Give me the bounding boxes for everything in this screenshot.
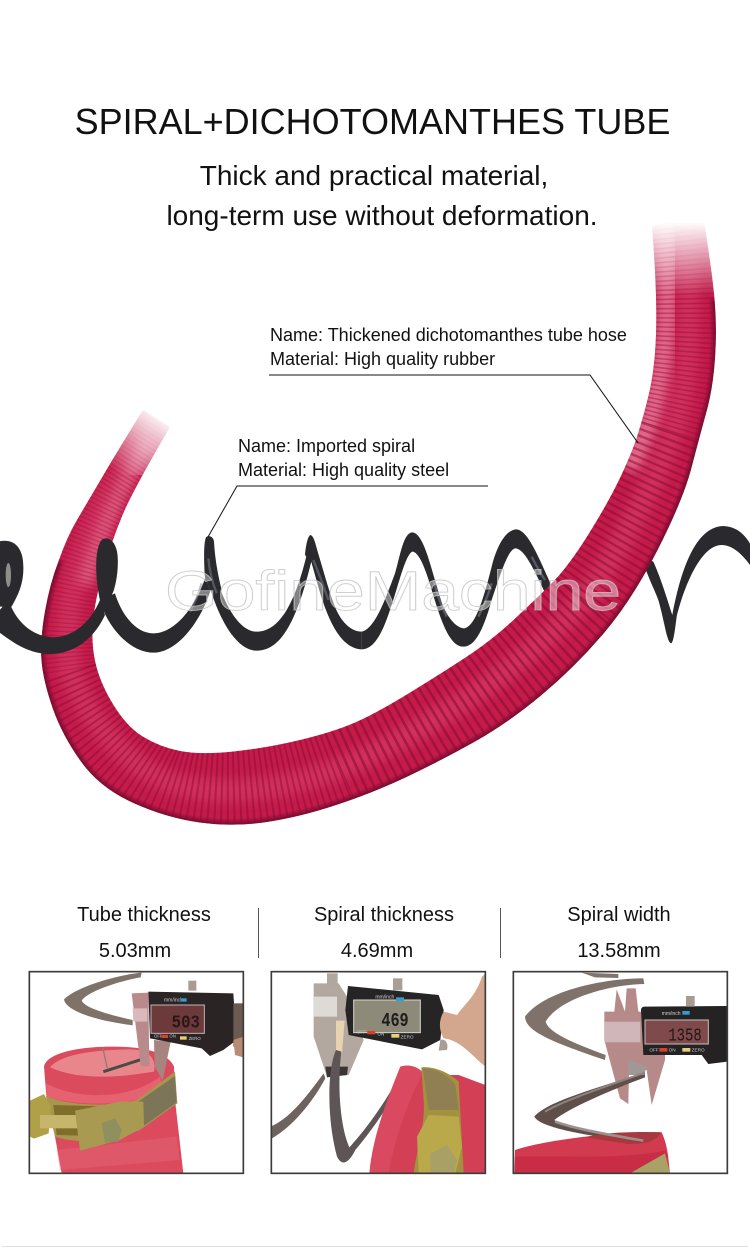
measurement value: spiral thickness: 4.69mm: [341, 940, 413, 962]
divider 2: [500, 908, 501, 958]
red hose: [41, 195, 730, 825]
photo: tube thickness measurement: OFF: [154, 1034, 163, 1039]
spiral: left part in front of the hose: [0, 535, 362, 654]
label: hose: [270, 325, 627, 369]
photo: spiral thickness measurement: 469: [381, 1010, 409, 1032]
hose end fade, top right: [630, 195, 730, 300]
measurement heading: spiral thickness: Spiral thickness: [314, 904, 454, 926]
measurement heading: tube thickness: Tube thickness: [77, 904, 211, 926]
spiral: right part behind the hose: [362, 526, 750, 649]
bottom edge line: [2, 1246, 748, 1247]
measurement value: spiral width: 13.58mm: [577, 940, 661, 962]
label: hose: Name: Thickened dichotomanthes tube hose: [270, 325, 627, 345]
photo: spiral width measurement: mm/inch: [662, 1011, 681, 1017]
photo: spiral width measurement: ZERO: [692, 1048, 705, 1053]
photo: spiral thickness measurement: [270, 970, 486, 1174]
subtitle: long-term use without deformation.: [166, 200, 598, 230]
hose highlight band: [68, 212, 688, 790]
photo: spiral thickness measurement: OFF: [357, 1029, 366, 1034]
photo: spiral width measurement: 1358: [668, 1027, 702, 1047]
photo: spiral thickness measurement: ZERO: [401, 1034, 414, 1039]
photo: spiral thickness measurement: ON: [377, 1031, 384, 1036]
divider 1: [258, 908, 259, 958]
photo: tube thickness measurement: 503: [172, 1012, 200, 1034]
photo: tube thickness measurement: ON: [169, 1034, 176, 1039]
label: hose: Material: High quality rubber: [270, 348, 495, 368]
photo: spiral width measurement: ON: [669, 1047, 676, 1052]
hose lower shadow: [41, 299, 716, 825]
hose end fade, top left: [90, 395, 190, 475]
leader line: hose: [269, 375, 638, 443]
measurement heading: spiral width: Spiral width: [567, 904, 671, 926]
photo: tube thickness measurement: [28, 970, 244, 1174]
watermark: GofineMachine: [165, 559, 621, 622]
measurement value: tube: 5.03mm: [99, 940, 171, 962]
title: SPIRAL+DICHOTOMANTHES TUBE: [75, 101, 670, 142]
photo: spiral thickness measurement: mm/inch: [375, 994, 394, 1000]
label: spiral: [238, 436, 449, 480]
subtitle: [166, 160, 598, 231]
photo: spiral width measurement: OFF: [649, 1047, 659, 1052]
photo: tube thickness measurement: mm/inch: [164, 998, 183, 1004]
hose inner light edge, top right: [632, 225, 667, 462]
hose inner light edge, top left: [85, 440, 150, 585]
hose ribs: [672, 212, 688, 432]
photo: spiral width measurement: [512, 970, 728, 1174]
label: spiral: Name: Imported spiral: [238, 436, 415, 456]
subtitle: Thick and practical material,: [200, 160, 548, 191]
hose and spiral illustration: [0, 224, 750, 825]
photo: tube thickness measurement: ZERO: [189, 1036, 201, 1041]
leader line: spiral: [208, 486, 488, 537]
label: spiral: Material: High quality steel: [238, 460, 449, 480]
